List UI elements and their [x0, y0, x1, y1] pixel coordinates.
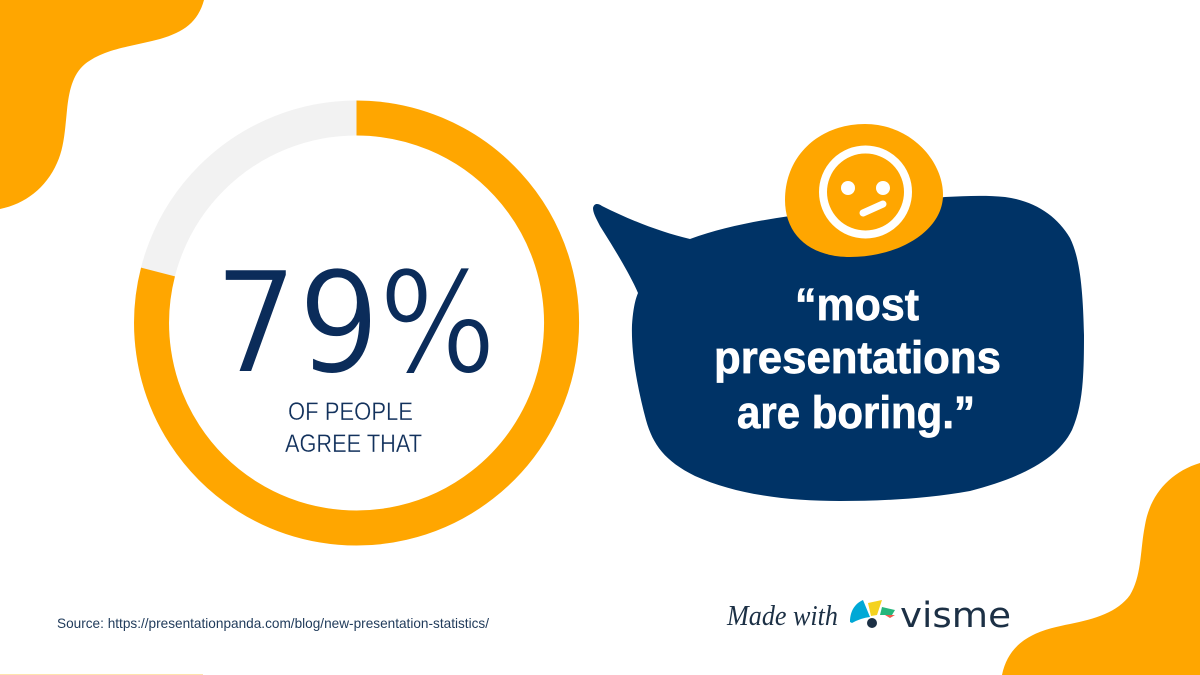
decorative blob: bottom right	[1002, 463, 1200, 675]
caption: of people agree that	[285, 398, 422, 458]
caption: of people agree that: AGREE THAT	[285, 430, 422, 458]
quote text	[714, 279, 1001, 438]
quote text: presentations	[714, 332, 1001, 383]
caption: of people agree that: OF PEOPLE	[288, 398, 413, 426]
visme wordmark: visme	[900, 596, 1011, 636]
speech bubble	[593, 196, 1084, 501]
source citation: Source: https://presentationpanda.com/blog/new-presentation-statistics/	[57, 615, 489, 631]
decorative line: bottom edge	[0, 674, 203, 675]
statistic: 79%: %	[379, 242, 496, 406]
icon: visme logo mark	[850, 600, 895, 628]
donut chart: 79 percent	[152, 118, 562, 528]
icon: confused face badge	[785, 124, 943, 257]
quote text: are boring.”	[737, 387, 975, 438]
decorative blob: top left	[0, 0, 204, 209]
made with label: Made with	[726, 600, 838, 632]
quote text: “most	[795, 279, 919, 330]
statistic: 79%: 9	[298, 242, 380, 406]
statistic: 79%: 7	[214, 242, 298, 406]
